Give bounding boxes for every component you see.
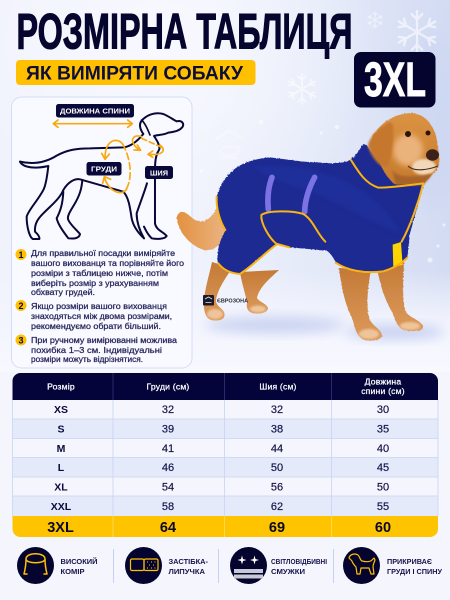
row M bbox=[57, 443, 389, 455]
table header: Груди (см) bbox=[146, 382, 190, 392]
row S bbox=[57, 424, 389, 436]
row XS: 32 bbox=[162, 404, 174, 416]
dog tail bbox=[177, 207, 227, 250]
step 2: рекомендуємо обрати більший. bbox=[31, 321, 161, 331]
row XXL: 55 bbox=[377, 501, 389, 513]
row XL: 54 bbox=[162, 482, 174, 494]
feature: covers chest and back: ПРИКРИВАЄ bbox=[387, 557, 433, 566]
yellow trim bbox=[217, 160, 423, 274]
paws highlight bbox=[207, 306, 420, 339]
table header bbox=[12, 373, 438, 400]
row XS bbox=[54, 404, 389, 416]
row stripes bbox=[12, 419, 438, 516]
measurement arrows bbox=[53, 120, 163, 193]
row XL: XL bbox=[54, 482, 68, 494]
highlight row background bbox=[12, 516, 438, 537]
far rear leg bbox=[240, 270, 279, 314]
brand logo: ЄВРОЗОНА bbox=[217, 298, 248, 304]
row 3XL: 3XL bbox=[47, 520, 74, 536]
label: chest: ГРУДИ bbox=[91, 165, 117, 174]
step 2: 2 bbox=[18, 301, 24, 311]
row XL: 56 bbox=[271, 482, 283, 494]
size badge: 3XL bbox=[364, 54, 426, 107]
photo: dog wearing blue coat bbox=[177, 113, 439, 341]
step 3: похибка 1–3 см. Індивідуальні bbox=[31, 345, 162, 355]
row XS: XS bbox=[54, 404, 68, 416]
feature: covers chest and back bbox=[343, 547, 442, 584]
velcro strap bbox=[393, 242, 403, 267]
row XL: 50 bbox=[377, 482, 389, 494]
step 1: вашого вихованця та порівняйте його bbox=[31, 258, 184, 268]
row M: 44 bbox=[271, 443, 283, 455]
feature: high collar: КОМІР bbox=[60, 567, 84, 576]
row XXL: 62 bbox=[271, 501, 283, 513]
step 3: При ручному вимірюванні можлива bbox=[31, 335, 177, 345]
step 2: знаходяться між двома розмірами, bbox=[31, 311, 172, 321]
dog head bbox=[368, 113, 439, 185]
step 1: розміри з таблицею нижче, потім bbox=[31, 268, 168, 278]
feature: high collar: ВИСОКИЙ bbox=[60, 557, 98, 566]
step 3: 3 bbox=[18, 335, 24, 345]
coat shading bbox=[253, 165, 400, 233]
row XS: 30 bbox=[377, 404, 389, 416]
table header: Розмір bbox=[47, 382, 75, 392]
row S: 39 bbox=[162, 424, 174, 436]
row L: 45 bbox=[377, 462, 389, 474]
row XXL bbox=[51, 501, 389, 513]
row L: 46 bbox=[162, 462, 174, 474]
row L: 50 bbox=[271, 462, 283, 474]
feature: velcro fastener: ЗАСТІБКА- bbox=[168, 557, 208, 566]
far front leg bbox=[377, 262, 423, 331]
row M: M bbox=[57, 443, 66, 455]
step 3 bbox=[16, 334, 177, 364]
reflective stripes bbox=[268, 177, 315, 212]
step 2: Якщо розміри вашого вихованця bbox=[31, 301, 167, 311]
subtitle banner: ЯК ВИМІРЯТИ СОБАКУ bbox=[26, 62, 244, 84]
table header: спини (см) bbox=[361, 386, 405, 396]
feature: reflective stripes: СМУЖКИ bbox=[271, 567, 305, 576]
row L bbox=[58, 462, 389, 474]
panel: how to measure bbox=[12, 97, 192, 368]
table header: Довжина bbox=[365, 376, 401, 386]
row XL bbox=[54, 482, 389, 494]
table header: Шия (см) bbox=[259, 382, 297, 392]
row 3XL: 60 bbox=[375, 520, 391, 536]
blue coat bbox=[217, 144, 424, 274]
feature: velcro fastener: ЛИПУЧКА bbox=[168, 567, 206, 576]
row S: 35 bbox=[377, 424, 389, 436]
label: neck bbox=[145, 166, 173, 179]
label: neck: ШИЯ bbox=[150, 168, 168, 178]
step 1: обхвату грудей. bbox=[31, 287, 95, 297]
feature: reflective stripes bbox=[230, 547, 327, 584]
step 2 bbox=[16, 300, 172, 331]
row L: L bbox=[58, 462, 65, 474]
row 3XL: 64 bbox=[160, 520, 176, 536]
row XXL: 58 bbox=[162, 501, 174, 513]
label: back length: ДОВЖИНА СПИНИ bbox=[60, 107, 130, 116]
step 1: 1 bbox=[18, 250, 24, 260]
step 1: виберіть розмір з урахуванням bbox=[31, 278, 159, 288]
step 1: Для правильної посадки виміряйте bbox=[31, 248, 175, 258]
label: back length bbox=[56, 104, 134, 118]
row 3XL bbox=[47, 520, 391, 536]
snowflakes bbox=[200, 11, 446, 263]
step 3: розміри можуть відрізнятися. bbox=[31, 354, 143, 364]
row XXL: XXL bbox=[51, 501, 72, 513]
row 3XL: 69 bbox=[269, 520, 285, 536]
label: chest bbox=[86, 162, 122, 176]
dog outline diagram bbox=[20, 113, 183, 239]
row M: 40 bbox=[377, 443, 389, 455]
row M: 41 bbox=[162, 443, 174, 455]
row S: 38 bbox=[271, 424, 283, 436]
near front leg bbox=[339, 268, 382, 341]
dividers bbox=[114, 549, 334, 583]
row S: S bbox=[57, 424, 65, 436]
feature: reflective stripes: СВІТЛОВІДБИВНІ bbox=[271, 557, 327, 566]
brand logo bbox=[203, 295, 248, 306]
feature: high collar bbox=[17, 547, 98, 584]
size table bbox=[12, 373, 438, 537]
feature: velcro fastener bbox=[125, 547, 208, 584]
feature: covers chest and back: ГРУДИ І СПИНУ bbox=[387, 567, 442, 576]
watermark logo bbox=[211, 125, 248, 163]
near rear leg bbox=[204, 262, 232, 321]
step 1 bbox=[16, 248, 184, 297]
row XS: 32 bbox=[271, 404, 283, 416]
